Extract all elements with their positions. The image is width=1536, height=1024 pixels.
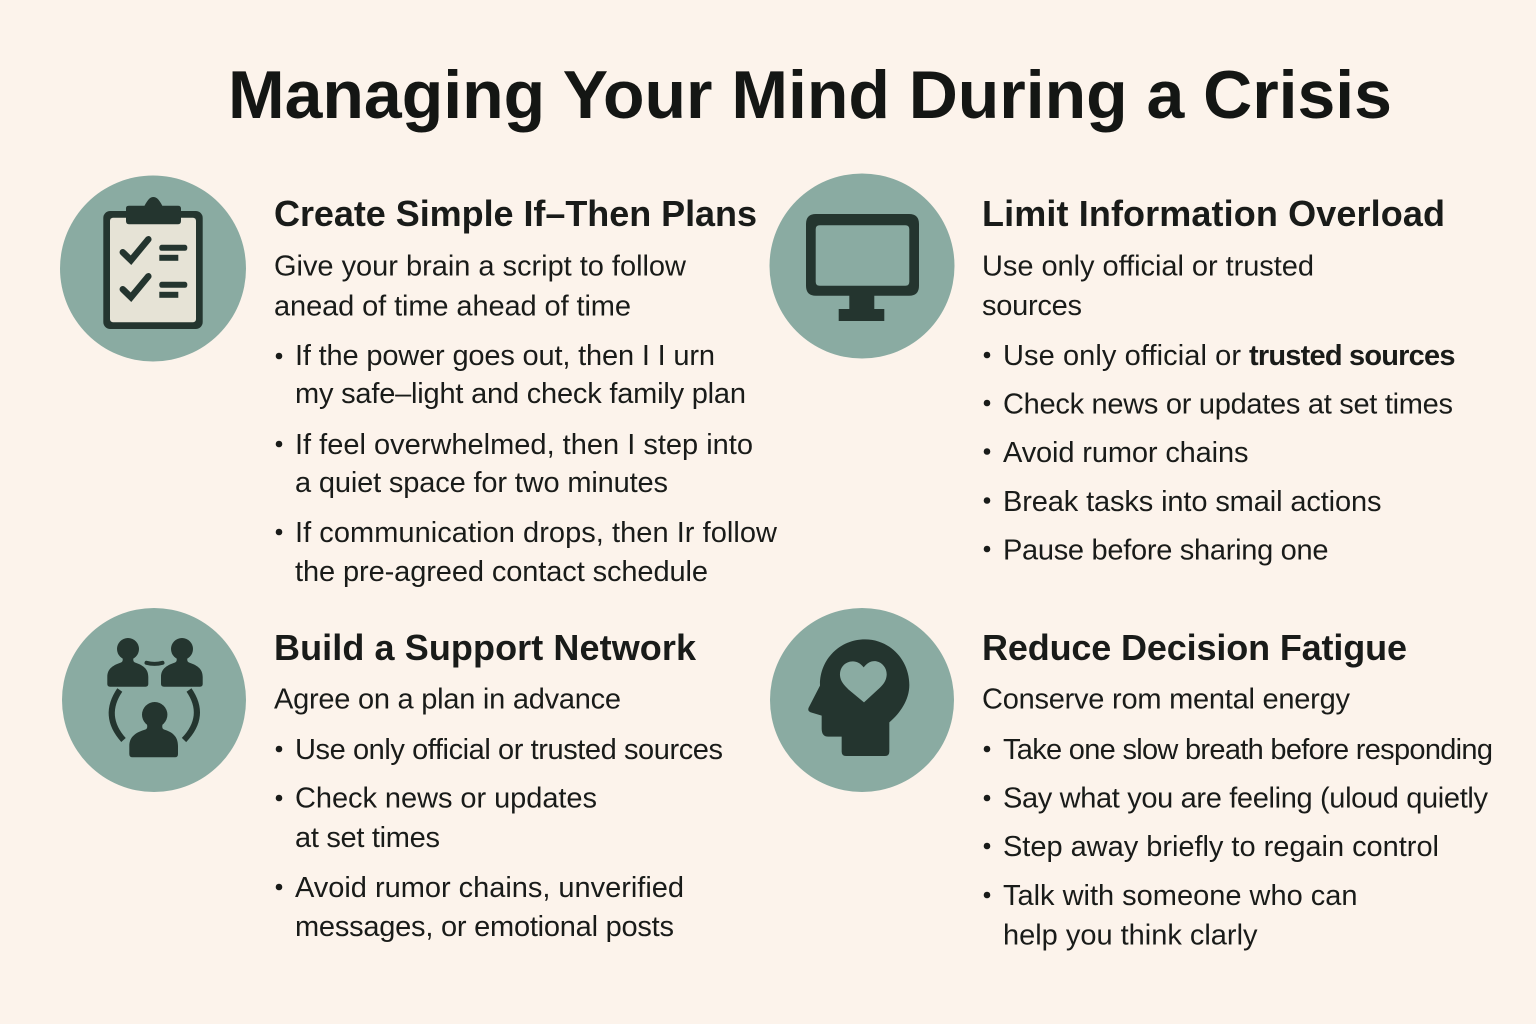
panel: build a support network [62,608,723,943]
bullet list: Step away briefly to regain control [1003,831,1439,863]
bullet list: Take one slow breath before responding [1003,734,1493,766]
bullet list: If communication drops, then Ir follow [295,517,778,549]
intro text [982,250,1314,322]
bullet list: Say what you are feeling (uloud quietly [1003,782,1488,814]
bullet list: If feel overwhelmed, then I step into [295,429,753,461]
intro text: Give your brain a script to follow [274,250,687,282]
icon: head with heart [770,608,954,792]
heading: limit information overload: Limit Information Overload [982,193,1445,234]
bullet list: trusted sources [1249,340,1456,372]
intro text: anead of time ahead of time [274,290,631,322]
bullet list [276,734,723,943]
bullet list [984,734,1493,952]
bullet list: Talk with someone who can [1003,880,1358,912]
intro text: sources [982,290,1082,322]
panel: limit information overload [770,174,1456,566]
intro text: Use only official or trusted [982,250,1314,282]
bullet list [984,340,1456,566]
bullet list: a quiet space for two minutes [295,467,668,499]
bullet list: Avoid rumor chains [1003,437,1248,469]
bullet list: messages, or emotional posts [295,911,674,943]
bullet list: Use only official or [1003,340,1241,372]
bullet list [276,340,778,588]
bullet list: help you think clarly [1003,920,1258,952]
heading: reduce decision fatigue: Reduce Decision Fatigue [982,627,1407,668]
bullet list: Check news or updates at set times [1003,388,1453,420]
intro text: Conserve rom mental energy [982,684,1350,716]
title: Managing Your Mind During a Crisis [228,57,1392,133]
bullet list: at set times [295,822,440,854]
bullet list: Check news or updates [295,782,597,814]
bullet list: Use only official or trusted sources [295,734,723,766]
panel: reduce decision fatigue [770,608,1493,952]
intro text [274,250,687,322]
icon: clipboard with checklist [60,176,246,362]
icon: three connected people [62,608,246,792]
bullet list: If the power goes out, then I I urn [295,340,715,372]
intro text: Agree on a plan in advance [274,684,621,716]
panel: create simple if-then plans [60,176,778,588]
bullet list: my safe–light and check family plan [295,378,746,410]
bullet list: Break tasks into smail actions [1003,486,1382,518]
bullet list: Pause before sharing one [1003,534,1328,566]
heading: create simple if-then plans: Create Simple If–Then Plans [274,193,757,234]
heading: build a support network: Build a Support Network [274,627,697,668]
bullet list: Avoid rumor chains, unverified [295,872,684,904]
icon: computer monitor [770,174,954,358]
bullet list: the pre-agreed contact schedule [295,556,708,588]
